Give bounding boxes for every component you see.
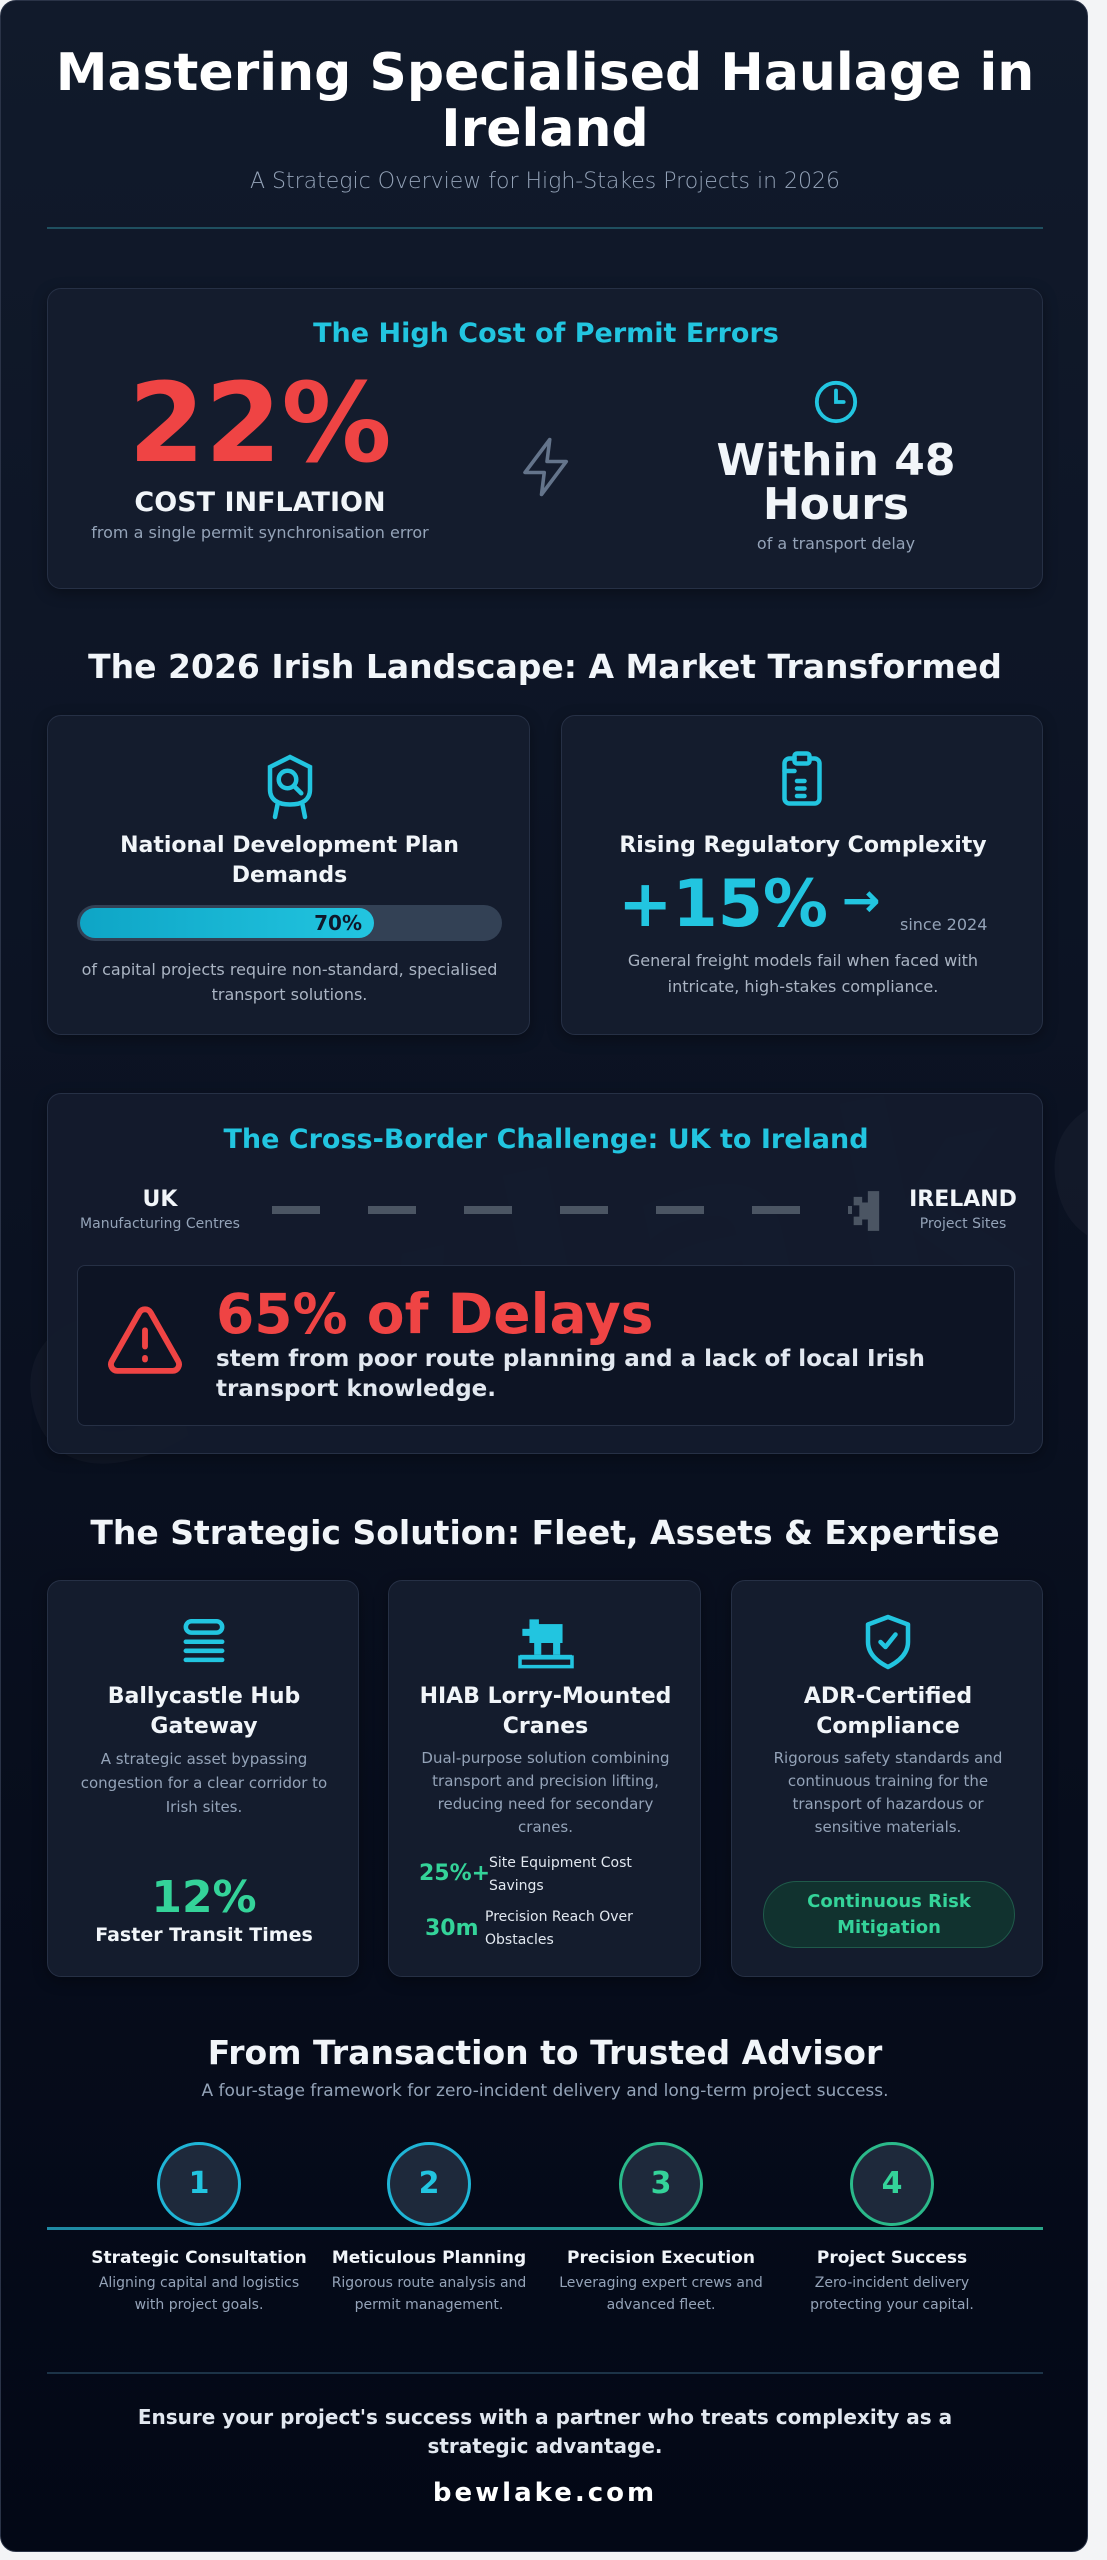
icon: shield check bbox=[866, 1614, 910, 1670]
stat: 12%: 12% bbox=[151, 1872, 257, 1923]
callout: 65% delays: transport knowledge. bbox=[216, 1376, 496, 1402]
panel: regulatory complexity: since 2024 bbox=[900, 915, 987, 934]
step 4: protecting your capital. bbox=[810, 2297, 974, 2313]
step 3: 3 bbox=[651, 2166, 671, 2201]
title: Ballycastle Hub bbox=[108, 1684, 300, 1709]
stat: 30m bbox=[425, 1909, 633, 1948]
subtitle: A four-stage framework for zero-incident delivery and long-term project success. bbox=[201, 2081, 889, 2101]
step 4: Project Success bbox=[817, 2248, 967, 2268]
title bbox=[108, 1684, 300, 1739]
title: ADR-Certified bbox=[804, 1684, 972, 1709]
title bbox=[804, 1684, 972, 1739]
pill: continuous risk mitigation: Continuous Risk bbox=[807, 1891, 971, 1912]
label: Ireland: IRELAND bbox=[909, 1187, 1017, 1212]
icon: clipboard bbox=[782, 751, 822, 806]
panel: national development plan bbox=[47, 715, 530, 1035]
step 3 bbox=[559, 2142, 763, 2313]
step 1: Aligning capital and logistics bbox=[99, 2275, 299, 2291]
title: Gateway bbox=[150, 1714, 258, 1739]
arrow: → bbox=[842, 873, 881, 927]
callout: 65% delays: stem from poor route planning and a lack of local Irish bbox=[216, 1346, 925, 1372]
footer text: Ensure your project's success with a partner who treats complexity as a bbox=[138, 2405, 952, 2429]
bar chart: 70% bbox=[77, 905, 502, 941]
pill: continuous risk mitigation bbox=[763, 1881, 1015, 1948]
panel: Ballycastle hub bbox=[47, 1580, 359, 1977]
title: HIAB Lorry-Mounted bbox=[420, 1684, 671, 1709]
title: Ireland bbox=[441, 99, 649, 159]
caption: transport solutions. bbox=[212, 985, 367, 1004]
caption bbox=[628, 951, 978, 996]
subtitle: A Strategic Overview for High-Stakes Projects in 2026 bbox=[250, 169, 840, 194]
stat: within 48 hours: of a transport delay bbox=[757, 534, 915, 553]
step 1: 1 bbox=[189, 2166, 209, 2201]
step 4: 4 bbox=[882, 2166, 902, 2201]
stat: 30m: Precision Reach Over bbox=[485, 1909, 633, 1925]
step 2: permit management. bbox=[355, 2297, 503, 2313]
step 2 bbox=[332, 2142, 526, 2313]
footer brand: bewlake.com bbox=[433, 2478, 657, 2508]
timeline bbox=[47, 2142, 1043, 2313]
label: Ireland bbox=[909, 1187, 1017, 1232]
stat: within 48 hours: Within 48 bbox=[717, 435, 955, 486]
stat: 22%: from a single permit synchronisation error bbox=[91, 523, 429, 542]
stat: +15%: +15% bbox=[618, 867, 828, 942]
panel: ADR compliance bbox=[731, 1580, 1043, 1977]
caption bbox=[82, 960, 497, 1004]
stat: 25%+ bbox=[419, 1855, 632, 1894]
stat: 25%+: Site Equipment Cost bbox=[489, 1855, 632, 1871]
heading: strategic solution: The Strategic Solution: Fleet, Assets & Expertise bbox=[90, 1513, 1000, 1552]
label: UK: UK bbox=[143, 1187, 177, 1212]
step 2: Meticulous Planning bbox=[332, 2248, 526, 2268]
caption: intricate, high-stakes compliance. bbox=[668, 977, 938, 996]
title: Compliance bbox=[816, 1714, 960, 1739]
description: Rigorous safety standards and continuous training for the transport of hazardous or sensitive materials. bbox=[774, 1749, 1002, 1836]
stat: 30m: 30m bbox=[425, 1916, 479, 1941]
icon: search badge bbox=[268, 754, 312, 820]
heading: The Cross-Border Challenge: UK to Ireland bbox=[223, 1124, 869, 1155]
stat: 12%: Faster Transit Times bbox=[95, 1924, 313, 1946]
heading: landscape: The 2026 Irish Landscape: A Market Transformed bbox=[88, 647, 1002, 686]
icon: hub stack bbox=[184, 1619, 224, 1662]
panel: permit errors bbox=[47, 288, 1043, 589]
label: UK bbox=[80, 1187, 240, 1232]
footer text: strategic advantage. bbox=[427, 2434, 663, 2458]
step 1: with project goals. bbox=[135, 2297, 263, 2313]
heading: The High Cost of Permit Errors bbox=[313, 318, 779, 349]
heading: trusted advisor: From Transaction to Trusted Advisor bbox=[208, 2033, 882, 2072]
step 3: advanced fleet. bbox=[607, 2297, 715, 2313]
icon: clock bbox=[814, 380, 858, 424]
step 3: Leveraging expert crews and bbox=[559, 2275, 763, 2291]
description: Dual-purpose solution combining transport and precision lifting, reducing need for secondary cranes. bbox=[421, 1749, 670, 1836]
callout: 65% delays bbox=[77, 1265, 1015, 1426]
stat: 30m: Obstacles bbox=[485, 1932, 554, 1948]
step 4: Zero-incident delivery bbox=[815, 2275, 969, 2291]
label: UK: Manufacturing Centres bbox=[80, 1216, 240, 1232]
stat: 22%: 22% bbox=[128, 359, 392, 487]
title: Cranes bbox=[503, 1714, 588, 1739]
icon: warning bbox=[108, 1306, 182, 1374]
step 1: Strategic Consultation bbox=[91, 2248, 307, 2268]
title bbox=[56, 43, 1034, 159]
panel: cross-border bbox=[47, 1093, 1043, 1454]
stat: 12% bbox=[95, 1872, 313, 1946]
bar chart: 70%: 70% bbox=[314, 911, 362, 935]
stat: within 48 hours: Hours bbox=[763, 479, 909, 530]
title bbox=[120, 833, 459, 888]
stat: 25%+: 25%+ bbox=[419, 1861, 490, 1886]
title: National Development Plan bbox=[120, 833, 459, 858]
stat: within 48 hours bbox=[717, 435, 955, 553]
panel: HIAB cranes bbox=[388, 1580, 701, 1977]
title: Mastering Specialised Haulage in bbox=[56, 43, 1034, 103]
panel: regulatory complexity bbox=[561, 715, 1043, 1035]
label: Ireland: Project Sites bbox=[920, 1216, 1006, 1232]
step 2: 2 bbox=[419, 2166, 439, 2201]
footer text bbox=[138, 2405, 952, 2458]
step 4 bbox=[810, 2142, 974, 2313]
route dashes bbox=[272, 1206, 852, 1214]
title bbox=[420, 1684, 671, 1739]
title: Rising Regulatory Complexity bbox=[619, 833, 987, 858]
step 3: Precision Execution bbox=[567, 2248, 755, 2268]
step 1 bbox=[91, 2142, 307, 2313]
pill: continuous risk mitigation: Mitigation bbox=[837, 1917, 941, 1938]
icon: lightning bbox=[523, 438, 568, 496]
title: Demands bbox=[232, 863, 347, 888]
stat: 25%+: Savings bbox=[489, 1878, 544, 1894]
step 2: Rigorous route analysis and bbox=[332, 2275, 526, 2291]
description: A strategic asset bypassing congestion for a clear corridor to Irish sites. bbox=[81, 1750, 327, 1816]
icon: crane truck bbox=[518, 1619, 574, 1668]
icon: ship bbox=[854, 1191, 880, 1231]
stat: 22%: COST INFLATION bbox=[134, 487, 386, 518]
caption: of capital projects require non-standard, specialised bbox=[82, 960, 497, 979]
callout: 65% delays: 65% of Delays bbox=[216, 1282, 653, 1346]
caption: General freight models fail when faced with bbox=[628, 951, 978, 970]
stat: 22% bbox=[91, 359, 429, 542]
